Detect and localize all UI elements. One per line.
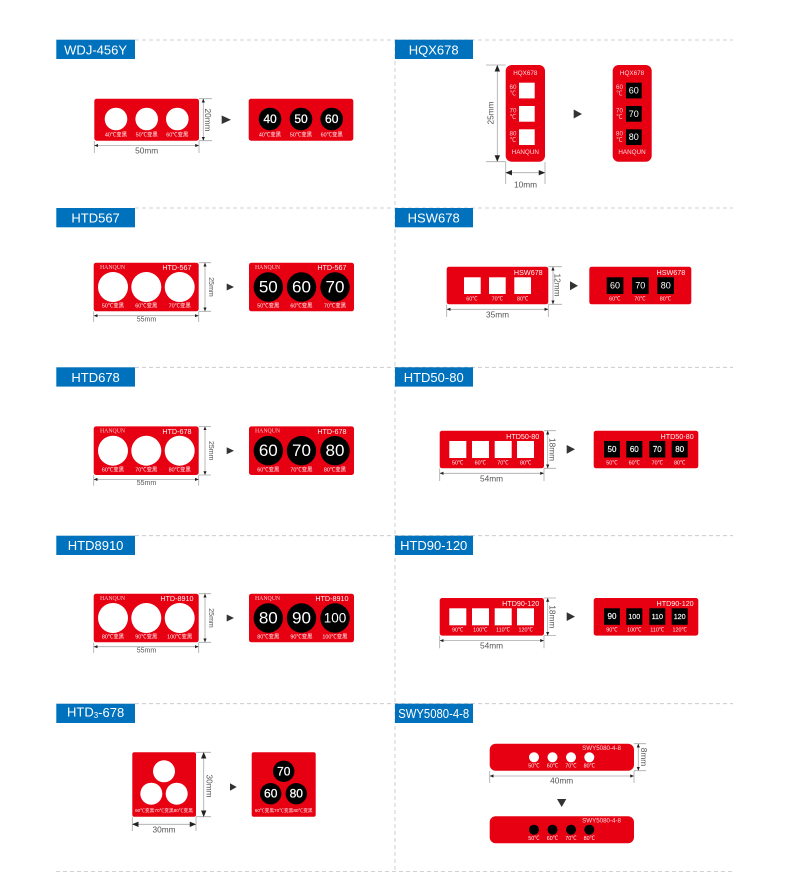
- card after: black circles: 70℃变黑: [290, 465, 313, 473]
- dimension: width 35mm: 35mm: [486, 310, 509, 320]
- card before: white squares: 60℃: [466, 295, 478, 302]
- card before: white circles: 70℃变黑: [135, 465, 158, 473]
- card before: white squares: 90℃: [452, 627, 464, 634]
- card after: black circles: 60℃变黑: [257, 465, 280, 473]
- card before: white circles: 50℃: [528, 763, 540, 770]
- card after: black circles: [252, 752, 316, 817]
- card after: black squares: 60: [610, 281, 620, 291]
- card before: white circles: 60℃变黑70℃变黑80℃变黑: [135, 807, 193, 814]
- heading: SWY5080-4-8: SWY5080-4-8: [398, 706, 469, 721]
- dimension: height 30mm: [196, 752, 215, 817]
- card before: white circles: 50℃变黑: [102, 302, 125, 310]
- card after: black squares: 60: [616, 84, 623, 91]
- dimension: width 30mm: [132, 817, 196, 834]
- card before: white circles: SWY5080-4-8: [582, 745, 622, 752]
- arrow: [570, 281, 578, 290]
- card before: white squares: 50℃: [452, 459, 464, 466]
- heading: HTD567: [56, 208, 135, 227]
- dimension: width 54mm: 54mm: [480, 641, 503, 651]
- card after: black circles: 80℃变黑: [257, 633, 280, 641]
- card before: white circles: 60℃: [547, 763, 559, 770]
- dimension: width 55mm: [94, 475, 199, 487]
- arrow: down: [557, 799, 566, 807]
- card after: black circles: 60℃: [547, 835, 559, 842]
- heading: HTD90-120: [395, 536, 473, 555]
- dimension: height 25mm: 25mm: [207, 441, 214, 461]
- card after: black circles: 90: [292, 608, 311, 628]
- arrow: [567, 445, 575, 454]
- dimension: width 54mm: [440, 636, 544, 651]
- card before: white circles: [132, 752, 196, 817]
- card after: black circles: 50℃变黑: [290, 130, 313, 138]
- heading: HQX678: HQX678: [409, 42, 459, 58]
- dimension: width 50mm: [94, 141, 199, 156]
- dimension: width 55mm: 55mm: [137, 647, 156, 654]
- dimension: width 54mm: [440, 468, 544, 483]
- dimension: width 50mm: 50mm: [135, 146, 158, 156]
- card before: white circles: HANQUN: [100, 596, 126, 602]
- heading: HSW678: [395, 208, 473, 227]
- card after: black circles: 100℃变黑: [322, 633, 348, 641]
- dimension: height 12mm: 12mm: [552, 273, 562, 297]
- card before: white squares: 70: [510, 107, 517, 114]
- arrow: [227, 614, 234, 622]
- dimension: height 20mm: 20mm: [203, 108, 213, 132]
- heading: HTD8910: HTD8910: [68, 538, 123, 553]
- card after: black squares: 90: [608, 612, 617, 621]
- card before: white circles: 80℃变黑: [169, 465, 191, 473]
- card after: black circles: 40℃变黑: [259, 130, 282, 138]
- heading: WDJ-456Y: WDJ-456Y: [64, 42, 127, 58]
- card before: white squares: [440, 431, 544, 468]
- panel: WDJ-456Y: [56, 40, 353, 156]
- heading: HTD3-678: HTD: [67, 704, 94, 720]
- card after: black squares: 50℃: [606, 459, 618, 466]
- card after: black squares: 80℃: [660, 295, 672, 302]
- dimension: width 55mm: 55mm: [137, 316, 156, 323]
- card before: white circles: 80℃变黑: [102, 633, 125, 641]
- card after: black squares: 60: [629, 86, 639, 96]
- card after: black circles: HTD-8910: [315, 594, 349, 603]
- heading: SWY5080-4-8: [395, 704, 473, 723]
- card after: black circles: HTD-567: [317, 263, 346, 272]
- card after: black squares: 80: [661, 281, 671, 291]
- card before: white circles: HTD-8910: [160, 594, 194, 603]
- card after: black circles: 50: [294, 112, 308, 126]
- card before: white circles: [490, 744, 634, 771]
- arrow: [230, 783, 237, 791]
- card after: black squares: [594, 431, 698, 468]
- panel: SWY5080-4-8: [395, 704, 649, 843]
- card before: white circles: 100℃变黑: [167, 633, 193, 641]
- card before: white squares: 120℃: [519, 627, 533, 634]
- card after: black squares: 70℃: [634, 295, 646, 302]
- dimension: height 25mm: [486, 65, 506, 162]
- card after: black circles: 60: [264, 787, 278, 801]
- card after: black squares: HANQUN: [618, 149, 646, 156]
- card after: black circles: 70: [292, 441, 311, 460]
- card before: white circles: 70℃变黑: [169, 302, 191, 310]
- card after: black circles: 60℃变黑70℃变黑80℃变黑: [255, 807, 313, 814]
- card before: white circles: 50℃变黑: [136, 130, 158, 138]
- panel: HTD90-120: [395, 536, 698, 651]
- card after: black circles: 60℃变黑: [321, 130, 343, 138]
- panel: HTD8910: [56, 536, 354, 654]
- card after: black squares: [589, 267, 691, 304]
- card before: white circles: 60℃变黑: [166, 130, 189, 138]
- dimension: width 30mm: 30mm: [152, 824, 176, 834]
- dimension: width 55mm: 55mm: [137, 480, 156, 487]
- dimension: height 25mm: 25mm: [486, 101, 496, 125]
- heading: HTD678: [56, 367, 135, 387]
- arrow: [222, 116, 231, 124]
- dimension: height 25mm: 25mm: [207, 277, 214, 297]
- card after: black circles: 40: [263, 112, 277, 126]
- card after: black squares: 70: [616, 107, 623, 114]
- card after: black circles: 70: [326, 278, 344, 296]
- card after: black squares: 60: [630, 445, 639, 454]
- card before: white squares: 110℃: [496, 627, 511, 634]
- card after: black squares: 80℃: [674, 459, 686, 466]
- card after: black squares: [613, 65, 652, 162]
- heading: HTD50-80: [395, 367, 473, 387]
- card after: black circles: 50: [259, 278, 278, 296]
- card after: black circles: 60: [259, 441, 278, 460]
- dimension: height 8mm: 8mm: [639, 748, 649, 766]
- card after: black circles: HANQUN: [255, 265, 281, 271]
- card before: white squares: HANQUN: [512, 149, 539, 156]
- card after: black squares: 70: [653, 445, 662, 454]
- arrow: [574, 110, 582, 118]
- card after: black circles: 70℃: [565, 835, 577, 842]
- card after: black circles: 70: [277, 764, 291, 778]
- heading: WDJ-456Y: [56, 40, 135, 59]
- panel: HQX678: [395, 40, 652, 190]
- dimension: height 12mm: [548, 267, 562, 304]
- card before: white circles: 60℃变黑: [102, 465, 125, 473]
- dimension: height 20mm: [199, 99, 213, 141]
- card after: black squares: ℃: [616, 90, 623, 98]
- card after: black squares: 110℃: [650, 627, 665, 634]
- dimension: width 35mm: [447, 304, 548, 320]
- card after: black circles: 90℃变黑: [290, 633, 313, 641]
- card after: black circles: HTD-678: [317, 427, 346, 436]
- card after: black circles: 50℃: [528, 835, 540, 842]
- card after: black circles: SWY5080-4-8: [582, 818, 622, 824]
- card before: white squares: ℃: [510, 137, 516, 144]
- card after: black squares: HSW678: [657, 268, 685, 277]
- card after: black squares: 70: [635, 281, 645, 291]
- card after: black squares: 50: [608, 445, 617, 454]
- card after: black squares: ℃: [616, 137, 623, 144]
- panel: HTD567: [56, 208, 354, 323]
- card after: black squares: 90℃: [606, 627, 618, 634]
- dimension: width 55mm: [94, 642, 199, 654]
- card before: white circles: [94, 426, 199, 475]
- card before: white squares: 80: [510, 130, 517, 138]
- panel: HTD50-80: [395, 367, 698, 483]
- card after: black circles: 80: [259, 608, 278, 628]
- card before: white squares: 70℃: [497, 459, 509, 466]
- arrow: [227, 447, 234, 454]
- dimension: width 40mm: 40mm: [550, 776, 573, 786]
- card after: black circles: [249, 99, 353, 141]
- panel: HSW678: [395, 208, 691, 320]
- card after: black circles: 80℃变黑: [324, 465, 347, 473]
- card after: black circles: 70℃变黑: [324, 302, 347, 310]
- dimension: width 40mm: [490, 771, 634, 786]
- heading: HTD90-120: HTD90-120: [400, 538, 467, 553]
- heading: HTD8910: [56, 536, 135, 555]
- heading: HTD3-678: 3: [94, 710, 99, 720]
- panel: HTD678: [56, 367, 354, 487]
- card before: white circles: HTD-678: [162, 427, 192, 436]
- card after: black circles: [249, 594, 354, 642]
- card before: white squares: 60: [510, 84, 517, 91]
- card after: black circles: HANQUN: [255, 596, 281, 602]
- dimension: height 25mm: [199, 594, 214, 642]
- card before: white circles: [94, 99, 199, 141]
- card after: black circles: 80: [290, 787, 303, 801]
- card before: white squares: 60℃: [475, 459, 487, 466]
- card before: white circles: HTD-567: [162, 263, 192, 272]
- card before: white squares: HQX678: [513, 70, 538, 77]
- card after: black circles: [490, 816, 634, 843]
- card before: white squares: ℃: [510, 114, 516, 121]
- heading: HTD3-678: -678: [98, 704, 124, 720]
- dimension: height 25mm: [199, 426, 214, 475]
- card after: black circles: HANQUN: [255, 428, 281, 434]
- card before: white circles: 70℃: [565, 763, 577, 770]
- card after: black squares: 70: [629, 109, 639, 119]
- card before: white squares: ℃: [510, 90, 516, 98]
- dimension: height 18mm: [544, 431, 558, 468]
- card before: white squares: 70℃: [492, 295, 504, 302]
- dimension: height 18mm: 18mm: [548, 605, 558, 628]
- card before: white squares: HSW678: [514, 268, 543, 277]
- arrow: [567, 612, 575, 621]
- card after: black squares: HQX678: [620, 70, 645, 77]
- dimension: width 55mm: [94, 312, 199, 323]
- card after: black circles: 80℃: [584, 835, 596, 842]
- card before: white circles: [94, 263, 199, 311]
- card before: white squares: 100℃: [473, 627, 488, 634]
- card before: white circles: HANQUN: [100, 265, 126, 271]
- heading: HTD50-80: HTD50-80: [404, 370, 464, 385]
- card before: white squares: HTD90-120: [502, 599, 539, 608]
- card after: black squares: 70℃: [652, 459, 664, 466]
- card after: black circles: 60: [292, 278, 311, 296]
- dimension: height 25mm: [199, 263, 214, 311]
- card before: white circles: 40℃变黑: [105, 130, 128, 138]
- card after: black circles: 60: [325, 112, 339, 126]
- card before: white squares: [447, 267, 548, 304]
- card after: black circles: 80: [326, 441, 344, 460]
- card after: black circles: [249, 263, 354, 311]
- card after: black squares: 100℃: [627, 627, 642, 634]
- card before: white circles: 90℃变黑: [135, 633, 158, 641]
- card before: white squares: [440, 598, 544, 636]
- card after: black squares: 60℃: [629, 459, 641, 466]
- dimension: width 54mm: 54mm: [480, 473, 503, 483]
- dimension: width 10mm: 10mm: [514, 180, 537, 190]
- card after: black squares: 80: [675, 445, 685, 454]
- dimension: height 18mm: [544, 598, 558, 636]
- heading: HTD3-678: [56, 704, 135, 723]
- dimension: height 8mm: [634, 744, 649, 771]
- heading: HTD567: HTD567: [71, 210, 120, 226]
- card before: white squares: 80℃: [520, 459, 532, 466]
- card after: black squares: HTD90-120: [657, 599, 694, 608]
- card after: black circles: 100: [324, 610, 346, 626]
- arrow: [227, 284, 234, 290]
- card after: black squares: [594, 598, 698, 636]
- card after: black squares: 120℃: [673, 627, 687, 634]
- card before: white squares: 80℃: [517, 295, 529, 302]
- card after: black squares: 100: [628, 612, 640, 621]
- card before: white squares: [506, 65, 545, 162]
- card after: black circles: [249, 426, 354, 475]
- card after: black squares: HTD50-80: [661, 432, 694, 441]
- card after: black circles: 60℃变黑: [290, 302, 313, 310]
- heading: HTD678: HTD678: [71, 370, 120, 385]
- card before: white squares: HTD50-80: [506, 432, 539, 441]
- dimension: height 25mm: 25mm: [207, 608, 214, 628]
- card before: white circles: HANQUN: [100, 428, 126, 434]
- card after: black squares: 110: [652, 612, 663, 621]
- dimension: height 18mm: 18mm: [548, 438, 558, 461]
- dimension: width 10mm: [506, 162, 545, 190]
- heading: HSW678: HSW678: [408, 210, 460, 226]
- card before: white circles: 80℃: [584, 763, 596, 770]
- card after: black squares: ℃: [616, 114, 623, 121]
- dimension: height 30mm: 30mm: [205, 774, 215, 798]
- card after: black circles: 50℃变黑: [257, 302, 280, 310]
- card after: black squares: 60℃: [609, 295, 621, 302]
- card before: white circles: [94, 594, 199, 642]
- card after: black squares: 80: [629, 132, 639, 142]
- heading: HQX678: [395, 40, 473, 59]
- panel: HTD3-678: [56, 704, 316, 834]
- card after: black squares: 120: [674, 612, 686, 621]
- card before: white circles: 60℃变黑: [135, 302, 158, 310]
- card after: black squares: 80: [616, 130, 623, 138]
